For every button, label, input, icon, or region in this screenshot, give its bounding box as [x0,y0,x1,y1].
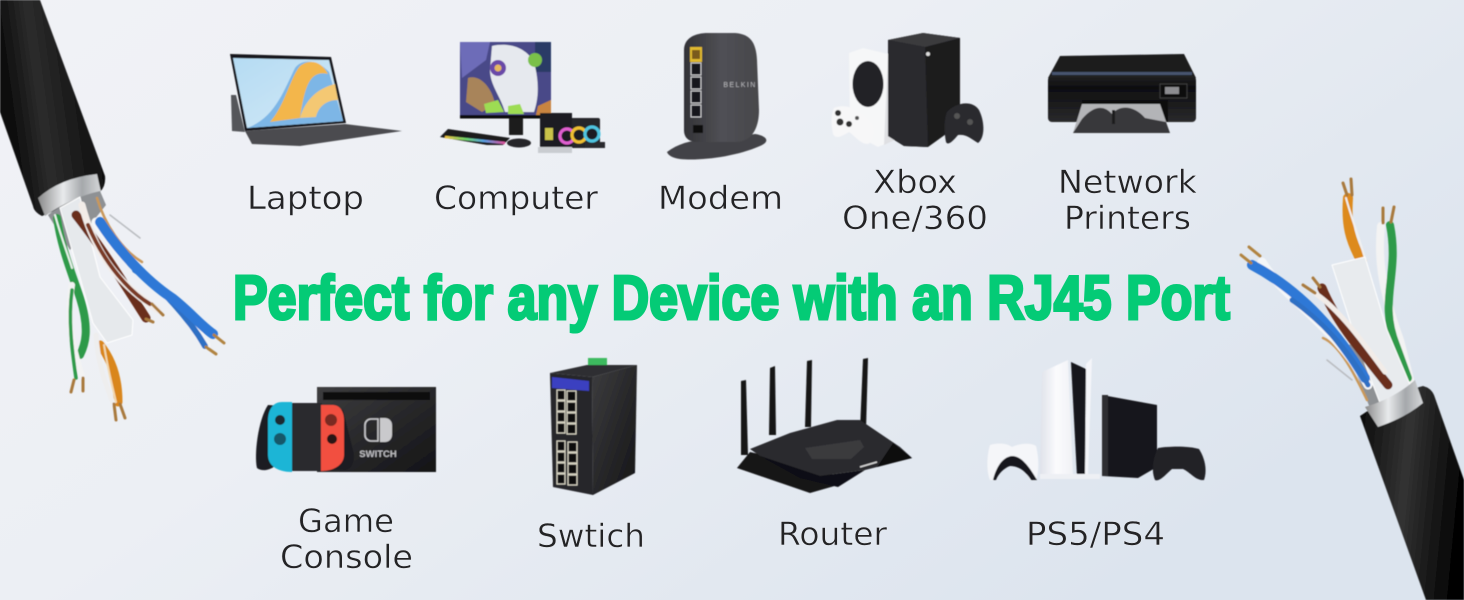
series x [888,33,960,147]
device: router [737,358,912,493]
title: Perfect for any Device with an RJ45 Port [233,264,1230,333]
green pair [55,215,86,392]
label: network printers: Printers [1064,199,1191,237]
cable jacket [1360,386,1464,600]
brown pair [76,205,163,322]
device: laptop [230,54,402,146]
red joycon [321,405,344,471]
side face [592,365,637,495]
label: xbox one/360 [842,163,988,237]
blue display label [552,377,589,391]
wallpaper waves [247,62,343,128]
printer top [1048,54,1196,78]
drain wires [97,198,142,262]
router shell [750,420,912,476]
router side vents [760,456,865,487]
keyboard [440,129,510,145]
blue pair [1241,247,1368,385]
cable interior [1345,340,1414,408]
pc tower with fans [540,113,572,148]
series s [849,48,900,147]
display [1160,84,1187,98]
dualshock [1153,447,1206,480]
printed paper [1073,104,1170,133]
foil shield [1365,380,1423,427]
top inset [805,440,864,459]
orange pair [1343,179,1366,262]
label: network printers: Network [1058,163,1197,201]
tablet centre [292,403,322,471]
paper slot [1082,100,1168,122]
right cable [1241,179,1464,600]
kickstand [231,95,245,132]
label: network printers [1058,163,1197,237]
label: modem: Modem [658,179,783,217]
brown pair [1303,278,1388,385]
printer body [1048,76,1196,122]
label: game console: Console [280,538,413,576]
gpu card [560,118,600,148]
drain wires [1323,338,1367,400]
blue sheen [1052,72,1192,75]
green pair [1380,207,1410,380]
white controller [832,106,875,144]
device: switch [550,358,637,495]
device: network printer [1048,54,1196,133]
body [684,33,759,142]
base [667,134,766,159]
label: computer: Computer [434,179,599,217]
blue pair [96,222,224,354]
left cable [0,0,224,420]
monitor [460,42,551,115]
label: laptop: Laptop [247,179,364,217]
ethernet ports [557,390,577,485]
label: game console [280,502,413,576]
label: swtich: Swtich [537,517,645,555]
dualsense [987,444,1038,480]
ps5 white panel [1040,360,1073,477]
cable interior [48,191,106,250]
antennas [741,358,868,455]
router base [737,452,838,493]
ports [690,47,703,133]
foil wrap [60,197,133,343]
foil wrap [1332,257,1411,403]
dock [317,387,436,472]
ps5 right panel [1085,358,1092,475]
device: game console [256,387,436,472]
device: computer [440,42,605,153]
orange pair [96,335,125,420]
ps5 black core [1071,362,1088,476]
ps4 [1102,395,1157,478]
mouse [507,138,531,148]
label: xbox one/360: One/360 [842,199,988,237]
foil shield [38,174,101,216]
cable jacket [0,0,105,216]
label: game console: Game [298,502,394,540]
grip [256,405,354,470]
ps5 stand [1040,474,1100,479]
device: playstation consoles [987,358,1206,480]
keyboard deck [245,124,402,146]
switch logo [365,419,378,441]
device: game console: SWITCH [359,449,397,460]
label: xbox one/360: Xbox [873,163,957,201]
label: router: Router [778,515,888,553]
front face [550,373,593,495]
top face [550,365,637,377]
screen [230,54,346,131]
stand [509,118,523,135]
device: modem [667,33,766,159]
blue joycon [268,402,292,472]
series s vent [852,61,884,107]
black controller [945,103,983,143]
device: xbox consoles [832,33,983,147]
brand mark: BELKIN [723,82,757,89]
label: ps5/ps4: PS5/PS4 [1026,515,1165,553]
green connector [588,358,607,367]
